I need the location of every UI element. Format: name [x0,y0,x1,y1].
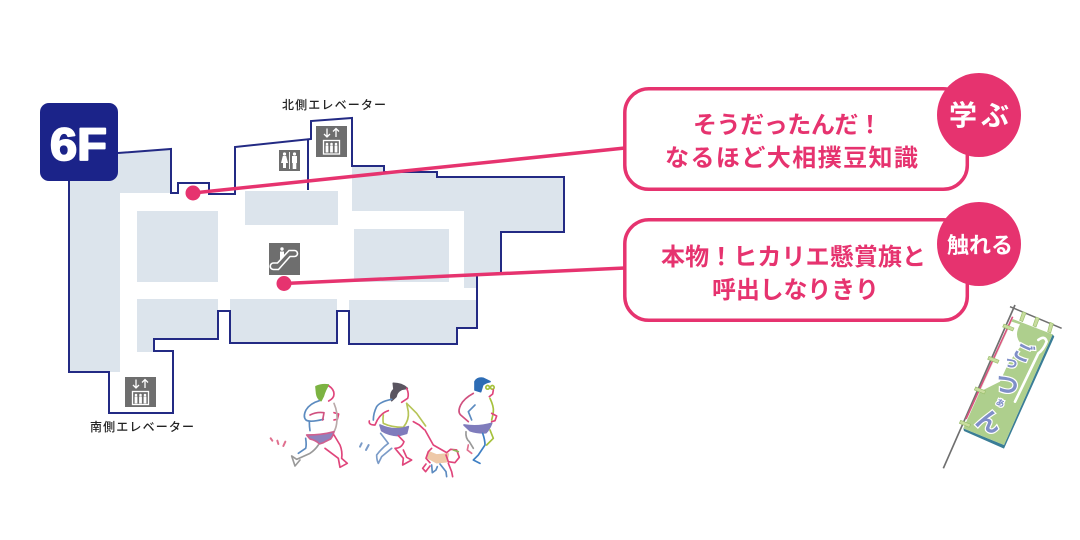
text: touch callout [661,244,926,304]
icon: south elevator [125,377,156,407]
runner 1 [271,385,347,467]
text: learn callout: なるほど大相撲豆知識 [665,145,918,172]
text: learn callout [665,112,918,172]
runner 1 and runner 2 and dog [271,383,459,477]
illustration: nobori banner [943,305,1062,468]
leash [425,430,447,453]
text: touch callout: 本物！ヒカリエ懸賞旗と [661,244,926,271]
label: south elevator: 南側エレベーター [90,419,194,434]
pole [943,305,1015,468]
map marker 2 [276,276,292,291]
badge: learn [937,73,1021,157]
white stripe [1015,338,1047,402]
floor badge: 6F: 6F [50,119,107,170]
panel: learn [625,73,1021,189]
banner cloth [963,319,1053,445]
text: touch callout: 呼出しなりきり [712,277,879,304]
leader line 1 [193,148,625,193]
map marker 1 [186,186,200,200]
shop areas [69,149,564,372]
icon: escalator [269,243,300,275]
loops [959,312,1053,427]
dog [423,448,459,477]
leader line 2 [284,268,625,284]
floor map [69,118,564,413]
banner text: ぁ [993,396,1007,410]
runner 3 [459,378,497,463]
floor badge: 6F [40,103,118,181]
banner text [971,338,1037,440]
pink edge [966,317,1013,419]
badge: touch: 触れる [947,233,1013,258]
badge: touch [937,202,1021,286]
banner text: つ [990,368,1023,403]
banner text: ご [1009,338,1037,368]
illustration: sumo runners with dog [271,378,497,477]
panel: touch [625,202,1021,320]
label: north elevator: 北側エレベーター [282,98,386,112]
runner 2 [360,383,447,465]
banner text: っ [1001,352,1022,373]
top bar [1010,307,1062,328]
banner text: ん [971,404,1006,440]
white area [980,322,1022,392]
banner side [963,334,1054,449]
icon: north elevator [316,126,347,157]
icon: restroom [279,150,300,171]
floor outline [69,118,564,413]
text: learn callout: そうだったんだ！ [693,112,882,139]
badge: learn: 学ぶ [949,100,1009,131]
